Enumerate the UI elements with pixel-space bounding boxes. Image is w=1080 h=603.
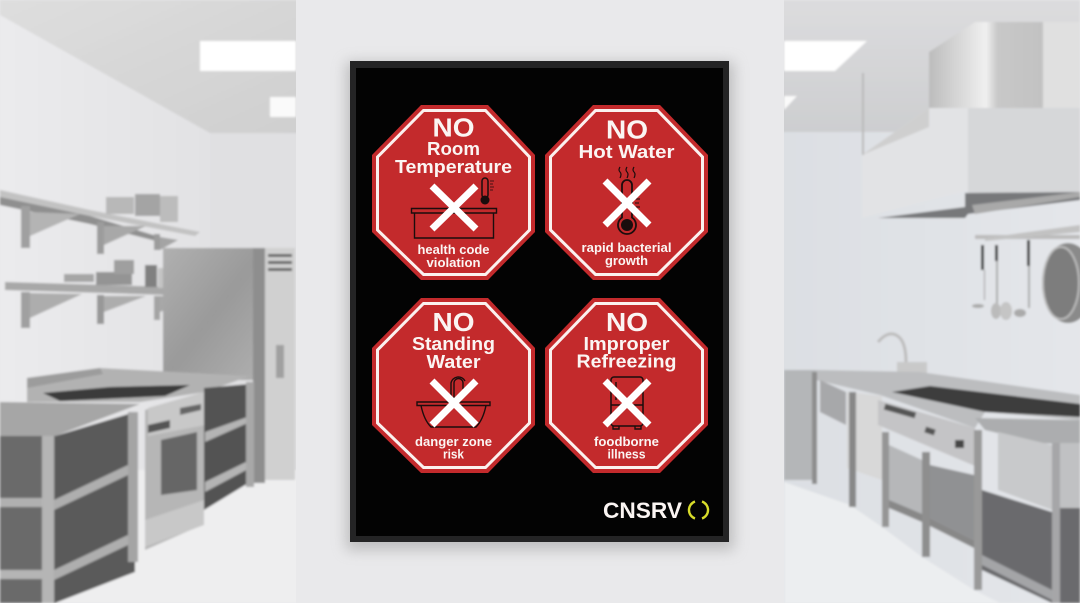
caption xyxy=(418,242,490,270)
caption: danger zone xyxy=(415,434,492,449)
center wall xyxy=(296,0,784,603)
logo: CNSRV: CNSRV xyxy=(603,498,682,523)
caption: violation xyxy=(426,255,481,270)
caption: foodborne xyxy=(594,434,659,449)
kitchen background: right xyxy=(780,0,1080,603)
icon: sink basin with faucet, crossed out xyxy=(417,377,490,427)
heading: NO xyxy=(432,112,474,142)
kitchen background: left xyxy=(0,0,300,603)
poster shadow xyxy=(346,62,734,550)
caption: illness xyxy=(608,446,646,462)
sign: no standing water xyxy=(372,298,535,473)
caption: risk xyxy=(443,446,465,462)
poster background xyxy=(356,68,723,536)
heading: Water xyxy=(426,352,480,372)
heading: Improper xyxy=(584,334,670,354)
poster frame xyxy=(350,61,729,542)
heading: Refreezing xyxy=(576,352,676,372)
icon: thermometer with steam, crossed out xyxy=(605,167,649,234)
heading: Temperature xyxy=(395,157,512,177)
caption: health code xyxy=(418,242,490,257)
heading: Room xyxy=(427,139,480,159)
poster xyxy=(350,61,729,542)
caption xyxy=(415,434,492,462)
caption: growth xyxy=(605,253,648,268)
heading xyxy=(395,112,512,177)
heading: NO xyxy=(432,307,474,337)
heading: NO xyxy=(606,114,648,144)
sign: no room temperature xyxy=(372,105,535,280)
sign: no hot water xyxy=(545,105,708,280)
heading xyxy=(576,307,676,372)
heading: Hot Water xyxy=(578,142,674,162)
caption xyxy=(594,434,659,462)
icon: basin with thermometer, crossed out xyxy=(412,178,496,238)
caption xyxy=(582,240,672,268)
caption: rapid bacterial xyxy=(582,240,672,255)
sign: no improper refreezing xyxy=(545,298,708,473)
icon: logo ring xyxy=(689,502,708,518)
heading xyxy=(578,114,674,162)
heading: Standing xyxy=(412,334,495,354)
heading: NO xyxy=(606,307,648,337)
icon: refrigerator, crossed out xyxy=(605,377,649,429)
heading xyxy=(412,307,495,372)
